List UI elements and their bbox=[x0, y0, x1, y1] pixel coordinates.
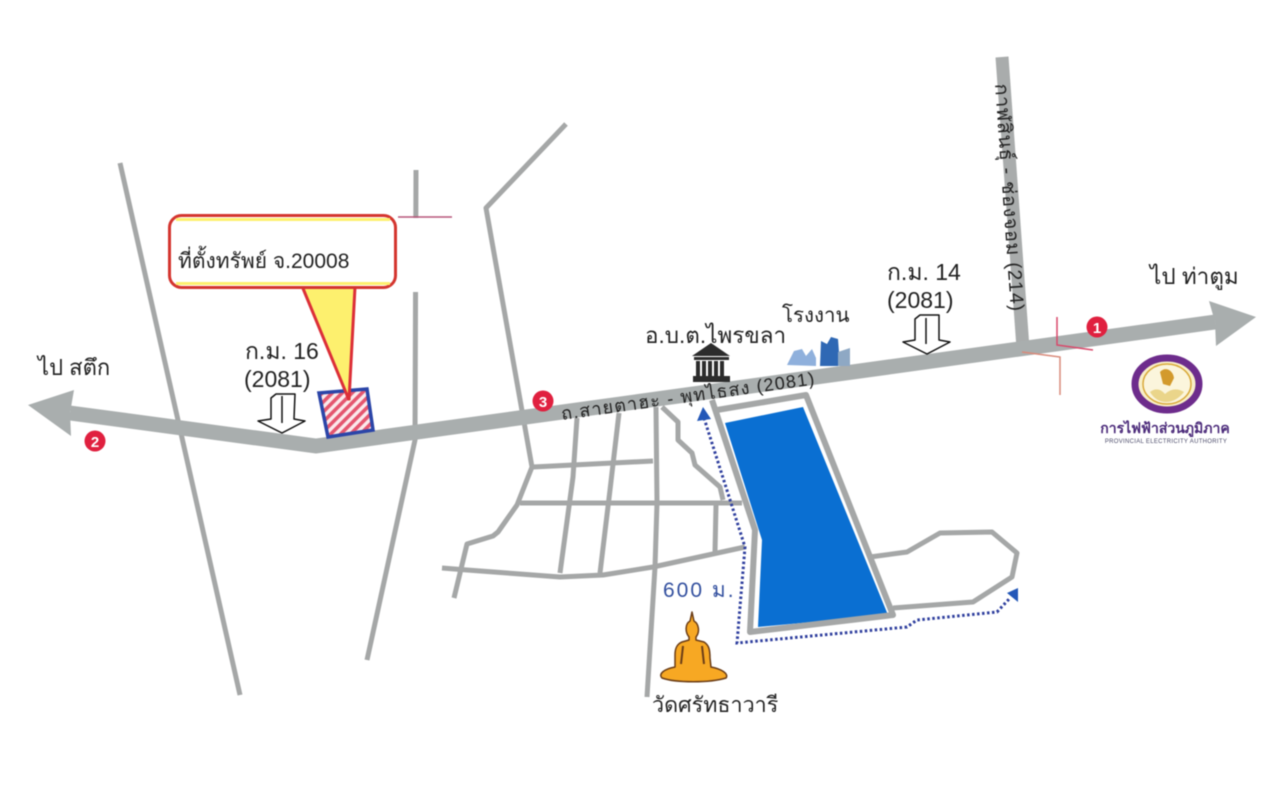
label: factory: โรงงาน bbox=[782, 303, 850, 327]
reservoir bbox=[712, 395, 893, 632]
logo: Provincial Electricity Authority bbox=[1100, 358, 1230, 445]
road name: Sai Ta Ya - Phutthaisong: ถ.สายตาฮะ - พุทไธสง (2081) bbox=[560, 367, 817, 425]
road: highway 214 bbox=[1002, 57, 1023, 348]
property plot bbox=[319, 389, 373, 437]
label: to Satuek: ไป สตึก bbox=[36, 355, 110, 380]
marker 2 bbox=[84, 430, 106, 452]
label: distance 600 m: 600 ม. bbox=[663, 579, 736, 602]
dotted route to temple bbox=[697, 407, 1018, 643]
marker 1 bbox=[1086, 316, 1108, 338]
marker 3: 3 bbox=[539, 394, 547, 411]
label: SAO Phon Khla: อ.บ.ต.ไพรขลา bbox=[645, 322, 786, 348]
marker 2: 2 bbox=[91, 434, 99, 451]
callout: property location: ที่ตั้งทรัพย์ จ.20008 bbox=[178, 246, 349, 273]
road: eastern loop bbox=[870, 532, 1017, 608]
label: km 14: (2081) bbox=[887, 287, 953, 313]
label: km 14 bbox=[887, 259, 961, 313]
white patch over central road bbox=[398, 218, 470, 292]
road grid: village streets bbox=[442, 407, 745, 697]
road: northern branch bbox=[454, 124, 566, 598]
icon: seated Buddha bbox=[661, 612, 727, 682]
icon: km 14 marker bbox=[903, 315, 950, 354]
road: west side road bbox=[120, 163, 240, 695]
main road with two direction arrows bbox=[28, 301, 1256, 446]
road: central side road bbox=[367, 170, 416, 660]
icon: government building bbox=[692, 343, 730, 382]
logo: Provincial Electricity Authority: PROVINCIAL ELECTRICITY AUTHORITY bbox=[1105, 439, 1227, 445]
label: Wat Sattha Wari: วัดศรัทธาวารี bbox=[652, 693, 778, 717]
label: km 16: ก.ม. 16 bbox=[245, 338, 319, 364]
road name: highway 214: กาฬสินธุ์ - ช่องจอม (214) bbox=[989, 83, 1029, 313]
junction trace marks bbox=[1022, 317, 1093, 395]
logo: Provincial Electricity Authority: การไฟฟ้าส่วนภูมิภาค bbox=[1100, 419, 1230, 437]
label: km 16: (2081) bbox=[244, 366, 310, 392]
icon: factory bbox=[787, 337, 850, 366]
label: to Tha Tum: ไป ท่าตูม bbox=[1148, 263, 1239, 290]
marker 3 bbox=[532, 390, 554, 412]
icon: km 16 marker bbox=[258, 394, 305, 433]
callout: property location bbox=[170, 216, 396, 402]
label: km 16 bbox=[244, 338, 319, 392]
marker 1: 1 bbox=[1093, 320, 1101, 337]
label: km 14: ก.ม. 14 bbox=[887, 259, 961, 285]
callout leader trace bbox=[398, 216, 452, 218]
